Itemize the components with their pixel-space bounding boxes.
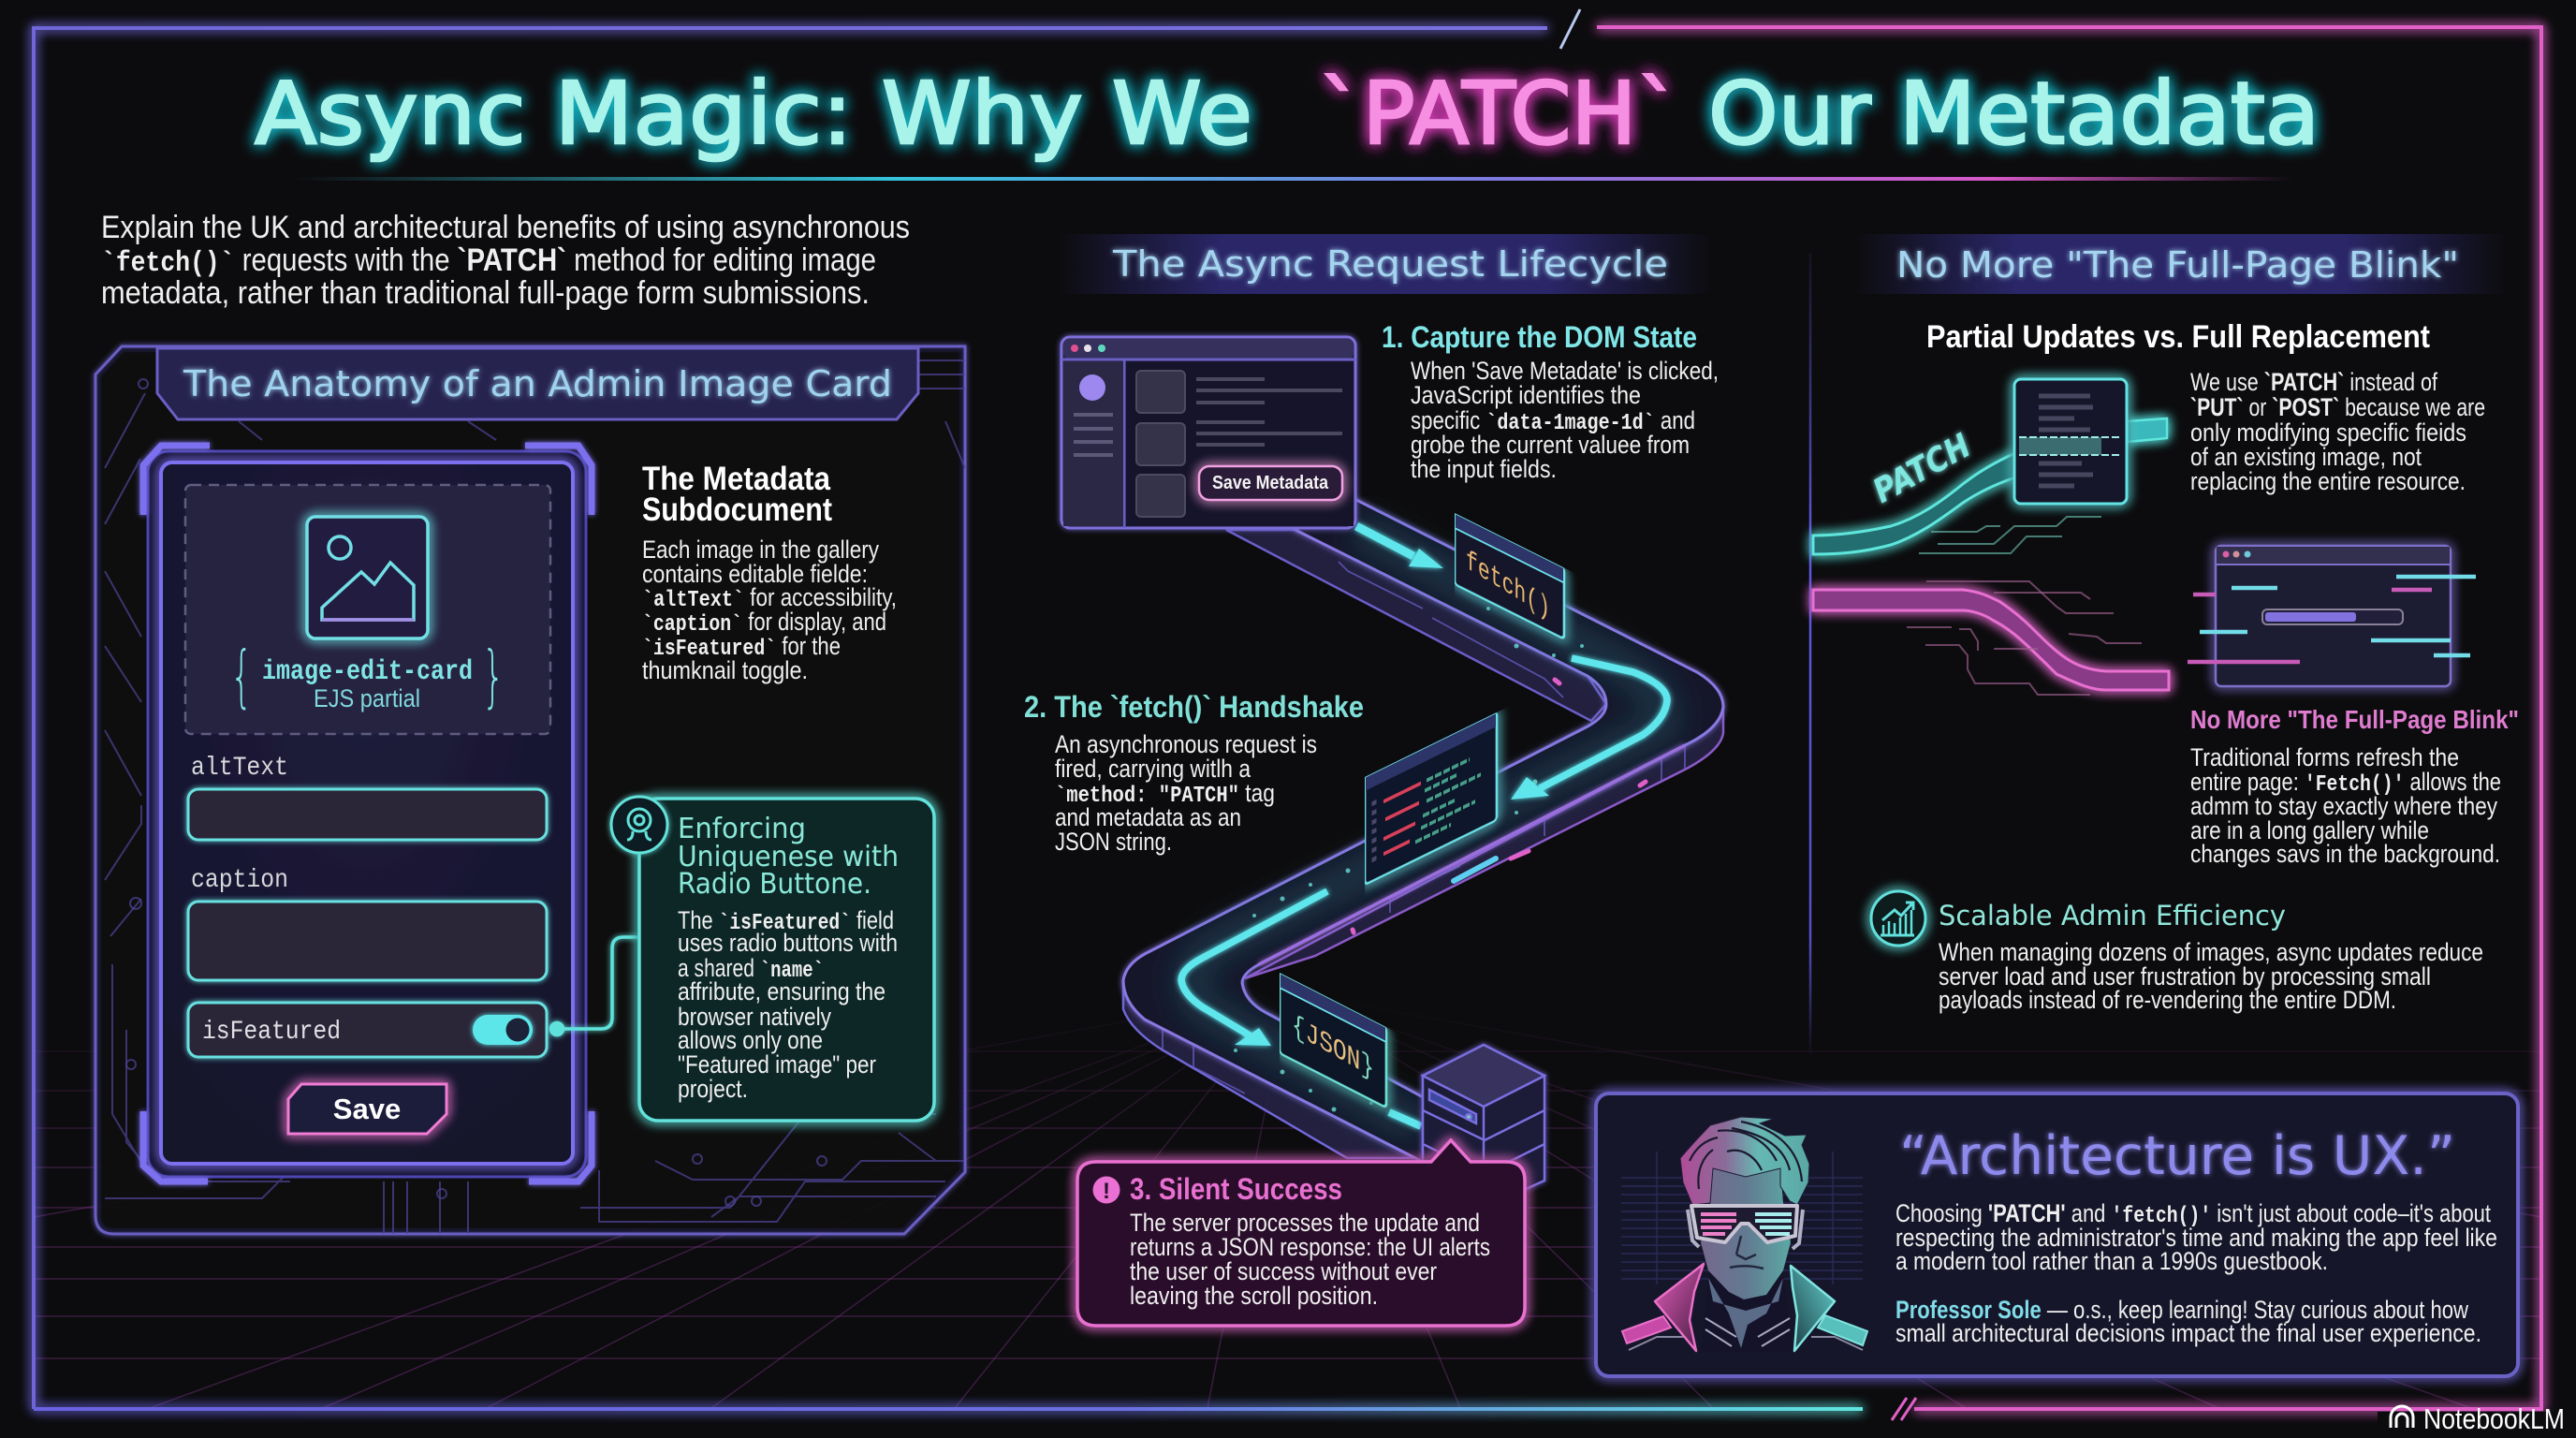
- blink heading: No More "The Full-Page Blink": [1896, 244, 2459, 286]
- lifecycle heading: [1058, 234, 1713, 294]
- save metadata button: [1199, 466, 1342, 500]
- save metadata button: Save Metadata: [1212, 473, 1329, 493]
- partial updates heading: Partial Updates vs. Full Replacement: [1926, 319, 2430, 355]
- partial updates text: [2190, 368, 2485, 495]
- floating card: fetch: [1455, 513, 1564, 638]
- perspective floor grid: [34, 992, 2541, 1408]
- title underline rule: [295, 177, 2293, 181]
- quote body: [1895, 1199, 2497, 1275]
- patch ribbon: [1813, 453, 2015, 554]
- shoulders: [1622, 1316, 1671, 1343]
- callout: enforcing uniqueness: a shared `name`: [678, 954, 824, 984]
- icon: image: [307, 517, 428, 638]
- callout: step 3 silent success: [1077, 1140, 1525, 1326]
- temples: [1688, 1210, 1803, 1249]
- purple inner lane glow: [1259, 745, 1685, 964]
- callout: step 3 silent success: leaving the scroll position.: [1130, 1282, 1378, 1310]
- title: Async Magic: Why We: [255, 64, 1252, 164]
- face: [1701, 1168, 1791, 1299]
- step 1 text: grobe the current valuee from: [1411, 431, 1690, 459]
- metadata subdocument text: thumknail toggle.: [642, 656, 808, 684]
- quote heading: “Architecture is UX.”: [1899, 1125, 2455, 1187]
- step 2 text: An asynchronous request is: [1055, 730, 1317, 758]
- step 2 text: `method: "PATCH" tag: [1055, 779, 1275, 809]
- callout: enforcing uniqueness: affribute, ensuring the: [678, 977, 886, 1005]
- floating card: JSON: {JSON}: [1292, 1008, 1374, 1087]
- patch document: [2014, 379, 2127, 504]
- intro text: `fetch()` requests with the `PATCH` method for editing image: [101, 242, 876, 280]
- title: Our Metadata: [1708, 64, 2320, 164]
- step 2 text: 2. The `fetch()` Handshake: [1024, 690, 1364, 724]
- flow arrow 3: [1181, 891, 1421, 1126]
- full-page blink text: Traditional forms refresh the: [2190, 743, 2459, 771]
- partial updates text: only modifying specific fieids: [2190, 418, 2466, 447]
- collar: [1655, 1264, 1704, 1351]
- metadata subdocument text: Subdocument: [642, 492, 832, 528]
- full-page blink text: admm to stay exactly where they: [2190, 792, 2497, 820]
- field: caption: caption: [191, 866, 288, 895]
- connector from toggle to callout: [550, 937, 639, 1035]
- full-page blink text: No More "The Full-Page Blink": [2190, 705, 2519, 734]
- callout: enforcing uniqueness: Enforcing: [678, 813, 806, 845]
- partial name label: EJS partial: [314, 684, 420, 712]
- road wall details: [1163, 562, 1685, 1093]
- full-page blink text: are in a long gallery while: [2190, 816, 2429, 844]
- scalable admin efficiency: [1871, 891, 2483, 1014]
- road side walls: [1123, 530, 1723, 1158]
- partial updates text: of an existing image, not: [2190, 443, 2422, 471]
- circuit traces: [1919, 517, 2101, 553]
- panel heading tab: The Anatomy of an Admin Image Card: [183, 363, 892, 404]
- blink window: [2216, 546, 2451, 686]
- floating card: fetch: fetch(): [1466, 544, 1550, 626]
- step 1 text: When 'Save Metadate' is clicked,: [1411, 357, 1719, 385]
- callout: enforcing uniqueness: project.: [678, 1075, 748, 1103]
- callout: step 3 silent success: The server processes the update and: [1130, 1209, 1480, 1237]
- metadata subdocument text: `altText` for accessibility,: [642, 583, 897, 613]
- illustration: full page reload ribbon and window: [1813, 546, 2476, 695]
- progress bar: [2262, 609, 2403, 624]
- road top surface: [1123, 500, 1723, 1161]
- callout: enforcing uniqueness: allows only one: [678, 1026, 823, 1054]
- callout: enforcing uniqueness: Radio Buttone.: [678, 868, 871, 901]
- step 2 text: fired, carrying witlh a: [1055, 755, 1251, 783]
- partial name label: [230, 637, 505, 715]
- step 2 text: and metadata as an: [1055, 803, 1241, 831]
- panel heading tab: [157, 348, 918, 419]
- partial updates text: `PUT` or `POST` because we are: [2190, 393, 2485, 421]
- data particles: [1234, 607, 1584, 1112]
- panel: anatomy of an admin image card: [95, 346, 965, 1234]
- callout: enforcing uniqueness: browser natively: [678, 1003, 831, 1031]
- shutter glasses: [1691, 1206, 1797, 1242]
- field: isFeatured toggle: [188, 1003, 547, 1057]
- quote body: a modern tool rather than a 1990s guestbook.: [1895, 1247, 2328, 1275]
- step 1 text: JavaScript identifies the: [1411, 381, 1641, 409]
- illustration: patch ribbon and document: [1813, 379, 2167, 554]
- partial updates text: We use `PATCH` instead of: [2190, 368, 2437, 396]
- icon: badge: [611, 797, 667, 853]
- jacket body lines: [1629, 1337, 1863, 1350]
- field: altText: [188, 754, 547, 840]
- flow arrow 2: [1511, 658, 1667, 800]
- panel outline: [95, 346, 965, 1234]
- scalable admin efficiency: server load and user frustration by processing small: [1939, 962, 2431, 990]
- field: caption: [188, 866, 547, 980]
- partial name label: {: [230, 637, 253, 715]
- column divider: [1809, 253, 1811, 1058]
- floating card: JSON: [1280, 973, 1386, 1108]
- step 1 text: specific `data-1mage-1d` and: [1411, 406, 1695, 436]
- scalable admin efficiency: When managing dozens of images, async updates reduce: [1939, 938, 2483, 966]
- signature: small architectural decisions impact the final user experience.: [1895, 1319, 2481, 1347]
- icon: alert: !: [1103, 1179, 1110, 1204]
- metadata subdocument text: contains editable fielde:: [642, 560, 868, 588]
- neck and shirt: [1701, 1273, 1794, 1353]
- metadata subdocument text: `isFeatured` for the: [642, 632, 841, 662]
- step 1 text: 1. Capture the DOM State: [1382, 320, 1697, 354]
- signature: Professor Sole — o.s., keep learning! Stay curious about how: [1895, 1296, 2468, 1324]
- title: `PATCH`: [1319, 64, 1680, 164]
- character: professor with shutter shades: [1622, 1117, 1867, 1353]
- metadata subdocument text: [642, 461, 897, 684]
- scalable admin efficiency: payloads instead of re-vendering the entire DDM.: [1939, 986, 2396, 1014]
- callout: enforcing uniqueness: The `isFeatured` field: [678, 906, 894, 936]
- panel: architecture is UX: [1596, 1093, 2518, 1376]
- step 1 text: [1382, 320, 1719, 483]
- hair: [1680, 1117, 1809, 1205]
- road accents: [1353, 680, 1646, 932]
- server stack: [1423, 1045, 1544, 1208]
- conveyor road: [1123, 500, 1723, 1161]
- callout: step 3 silent success: 3. Silent Success: [1130, 1172, 1342, 1206]
- lifecycle heading: The Async Request Lifecycle: [1112, 243, 1668, 285]
- icon: rising chart: [1871, 891, 1925, 946]
- partial name label: image-edit-card: [262, 656, 473, 688]
- browser window with save metadata button: [1061, 337, 1355, 528]
- icon: alert: [1093, 1176, 1120, 1204]
- mentor grid backdrop: [1621, 1152, 1863, 1284]
- image placeholder dashed box: [185, 485, 550, 734]
- full-page blink text: changes savs in the background.: [2190, 840, 2500, 868]
- partial name label: }: [482, 637, 505, 715]
- intro text: [101, 210, 910, 311]
- scalable admin efficiency: Scalable Admin Efficiency: [1939, 900, 2286, 932]
- circuit traces: [105, 360, 965, 1234]
- title: [255, 64, 2320, 164]
- floating card: code: [1365, 712, 1497, 885]
- glitch lines: [2188, 577, 2476, 662]
- full-page blink text: [2190, 705, 2519, 868]
- patch label: PATCH: [1866, 427, 1977, 511]
- save button: Save: [333, 1093, 401, 1125]
- flow arrow 1: [1356, 526, 1443, 568]
- metadata subdocument text: Each image in the gallery: [642, 536, 879, 564]
- intro text: metadata, rather than traditional full-page form submissions.: [101, 275, 870, 311]
- callout: step 3 silent success: returns a JSON response: the UI alerts: [1130, 1233, 1490, 1261]
- circuit traces: [1907, 581, 2142, 695]
- field: altText: altText: [191, 754, 288, 783]
- step 1 text: the input fields.: [1411, 455, 1557, 483]
- device frame: [143, 446, 592, 1181]
- step 2 text: [1024, 690, 1364, 856]
- callout: step 3 silent success: the user of success without ever: [1130, 1257, 1437, 1285]
- metadata subdocument text: `caption` for display, and: [642, 608, 886, 638]
- callout: enforcing uniqueness: uses radio buttons with: [678, 929, 898, 957]
- callout: enforcing uniqueness: "Featured image" per: [678, 1050, 876, 1078]
- blink heading: [1853, 234, 2509, 294]
- intro text: Explain the UK and architectural benefits of using asynchronous: [101, 210, 910, 245]
- callout: enforcing uniqueness: [611, 797, 934, 1121]
- metadata subdocument text: The Metadata: [642, 461, 830, 497]
- quote body: Choosing 'PATCH' and 'fetch()' isn't just about code–it's about: [1895, 1199, 2491, 1229]
- signature: [1895, 1296, 2481, 1347]
- full-page blink text: entire page: 'Fetch()' allows the: [2190, 768, 2501, 798]
- save button: [288, 1084, 446, 1134]
- road teal haze: [1191, 529, 1663, 1127]
- pink ribbon: [1813, 590, 2169, 690]
- callout: enforcing uniqueness: Uniquenese with: [678, 841, 899, 873]
- partial updates text: replacing the entire resource.: [2190, 467, 2466, 495]
- field: isFeatured toggle: isFeatured: [202, 1018, 341, 1047]
- step 2 text: JSON string.: [1055, 828, 1172, 856]
